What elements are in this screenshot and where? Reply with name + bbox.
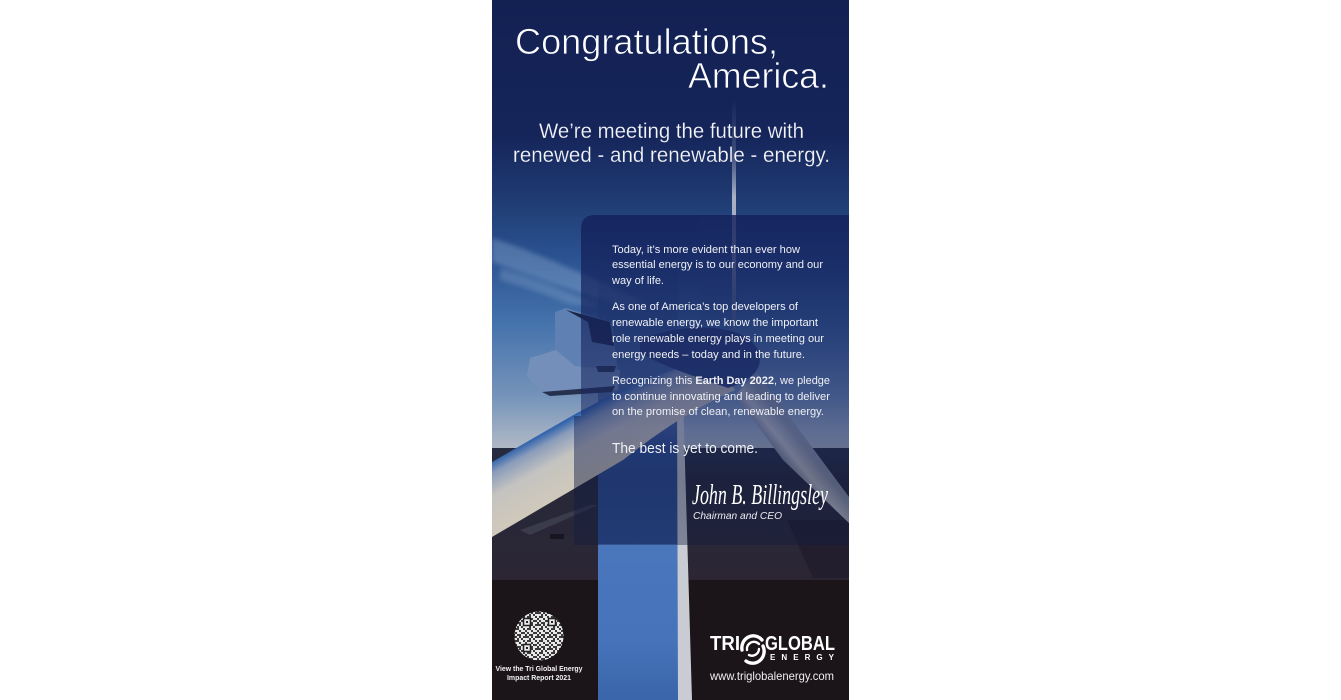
wind turbine left blade [492, 358, 735, 537]
body text: energy needs – today and in the future. [612, 349, 805, 361]
website url: www.triglobalenergy.com [709, 670, 834, 683]
body text: essential energy is to our economy and our [612, 259, 823, 271]
closing line: The best is yet to come. [612, 441, 758, 457]
signatory title: Chairman and CEO [693, 510, 782, 522]
body text: Recognizing this Earth Day 2022, we pledge [612, 375, 830, 387]
subtitle: renewed - and renewable - energy. [513, 144, 830, 167]
body text: renewable energy, we know the important [612, 317, 819, 329]
signature: John B. Billingsley [692, 480, 828, 511]
subtitle [513, 120, 830, 167]
body text: to continue innovating and leading to deliver [612, 391, 830, 403]
QR code badge [514, 612, 564, 660]
body text: way of life. [611, 275, 664, 287]
QR caption [496, 664, 582, 682]
title [515, 21, 829, 96]
title: America. [688, 55, 829, 96]
wind turbine tower [598, 215, 692, 700]
title: Congratulations, [515, 21, 778, 62]
wind turbine nacelle [527, 308, 620, 396]
body text: Today, it’s more evident than ever how [612, 244, 801, 256]
wind turbine hub [640, 328, 760, 388]
logo: Tri Global Energy: TRI [710, 633, 740, 655]
QR caption: Impact Report 2021 [507, 673, 571, 682]
body text: As one of America’s top developers of [612, 301, 799, 313]
logo swirl icon [742, 636, 764, 663]
logo: Tri Global Energy: ENERGY [770, 653, 835, 662]
tower lit edge [677, 396, 692, 700]
body text: on the promise of clean, renewable energy. [612, 406, 824, 418]
poster background: sky and ground photograph [492, 0, 849, 700]
logo: Tri Global Energy: GLOBAL [765, 633, 835, 655]
wind turbine rear mast blade [700, 100, 736, 330]
subtitle: We’re meeting the future with [539, 120, 804, 143]
wind turbine right blade [735, 373, 849, 523]
body text: role renewable energy plays in meeting our [612, 333, 824, 345]
logo: Tri Global Energy [710, 633, 835, 663]
body text [611, 244, 830, 418]
translucent text panel [574, 215, 849, 545]
QR caption: View the Tri Global Energy [496, 664, 582, 673]
